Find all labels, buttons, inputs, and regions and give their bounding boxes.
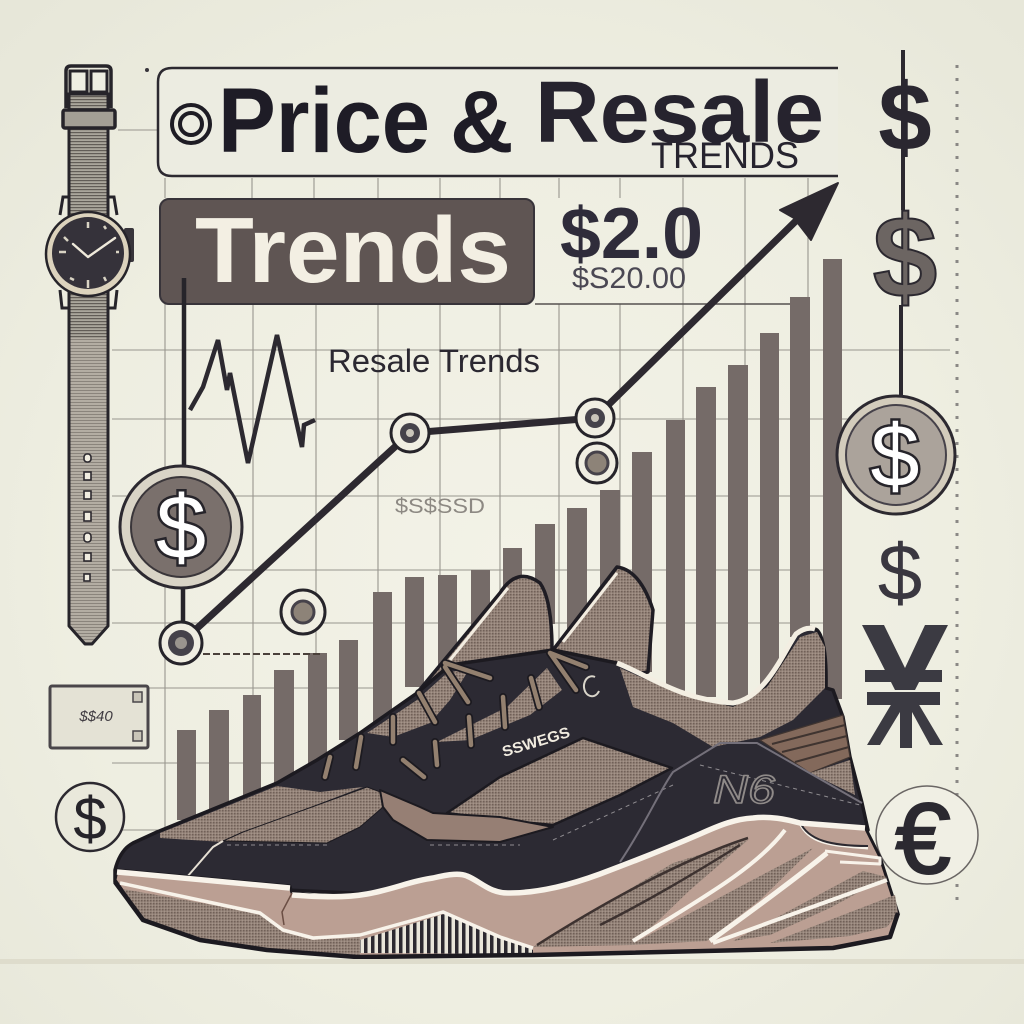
icon: left dollar coin [120, 466, 242, 588]
price tag [50, 686, 148, 748]
sneaker: heel tab [760, 715, 850, 773]
corner marks [145, 68, 149, 72]
blurred chart label: $S$SSD [395, 495, 485, 518]
sneaker: forefoot outsole [117, 888, 360, 955]
sneaker: lace panels [367, 668, 562, 742]
sneaker: rear toe suede [160, 786, 363, 842]
midsole top edge [117, 817, 865, 897]
sparkline [190, 335, 315, 463]
icon: top dollar sign: $ [878, 64, 932, 171]
trends banner: Trends [195, 198, 511, 302]
icon: left dollar coin: $ [156, 478, 206, 578]
trend markers [160, 399, 617, 664]
sneaker: side mesh panel [447, 738, 672, 825]
grommet [584, 676, 599, 696]
label: Resale Trends: Resale Trends [328, 343, 540, 379]
icon: yen sign [862, 625, 948, 748]
trend arrow [181, 183, 838, 643]
dashed baseline [203, 653, 320, 655]
title: Price: Price [218, 70, 430, 172]
collar trim [617, 628, 815, 703]
subtitle: TRENDS: TRENDS [651, 135, 799, 176]
sneaker: collar panel [620, 632, 825, 747]
sneaker: side overlay edge [620, 743, 862, 862]
price: small: $S20.00 [572, 262, 686, 295]
white toe edge [187, 841, 223, 877]
left coin stem [183, 278, 184, 625]
sneaker: ribbed arch [360, 913, 533, 954]
icon: right dollar coin [837, 396, 955, 514]
title: ampersand: & [450, 72, 514, 171]
sneaker: side label: SSWEGS [500, 724, 572, 761]
icon: wristwatch [46, 66, 134, 644]
sneaker: heel stripes [533, 822, 898, 947]
icon: small dollar coin: $ [73, 785, 107, 852]
tongue highlights [450, 573, 617, 660]
currency stem [901, 50, 903, 396]
icon: target ring [172, 105, 210, 143]
sneaker: tongues [417, 567, 653, 700]
bar chart [177, 259, 842, 820]
sneaker: laces [325, 653, 586, 777]
toe notch [282, 893, 292, 925]
sneaker: heel counter [810, 760, 855, 795]
icon: euro coin: € [895, 783, 951, 895]
icon: right dollar coin: $ [871, 406, 919, 505]
icon: second dollar sign: $ [873, 192, 937, 322]
sneaker: front toe suede [223, 787, 383, 843]
dotted right edge [956, 65, 958, 908]
icon: small dollar sign: $ [878, 528, 922, 617]
sneaker: logo: N6 [713, 768, 776, 812]
title panel [158, 64, 838, 176]
outsole edge [115, 882, 898, 957]
price: large: $2.0 [560, 194, 703, 274]
midsole highlight [120, 883, 533, 948]
ground shadow [0, 959, 1024, 964]
sneaker: vamp overlay [380, 790, 553, 842]
sneaker [115, 567, 898, 957]
price tag: $$40 [78, 708, 113, 725]
sneaker: midsole [115, 816, 898, 957]
sneaker: upper silhouette [115, 628, 868, 900]
title: Resale: Resale [535, 64, 824, 161]
stitching [227, 765, 860, 845]
heel tab ribs [772, 725, 849, 762]
icon: small dollar coin [56, 783, 124, 852]
icon: euro coin [876, 783, 978, 895]
